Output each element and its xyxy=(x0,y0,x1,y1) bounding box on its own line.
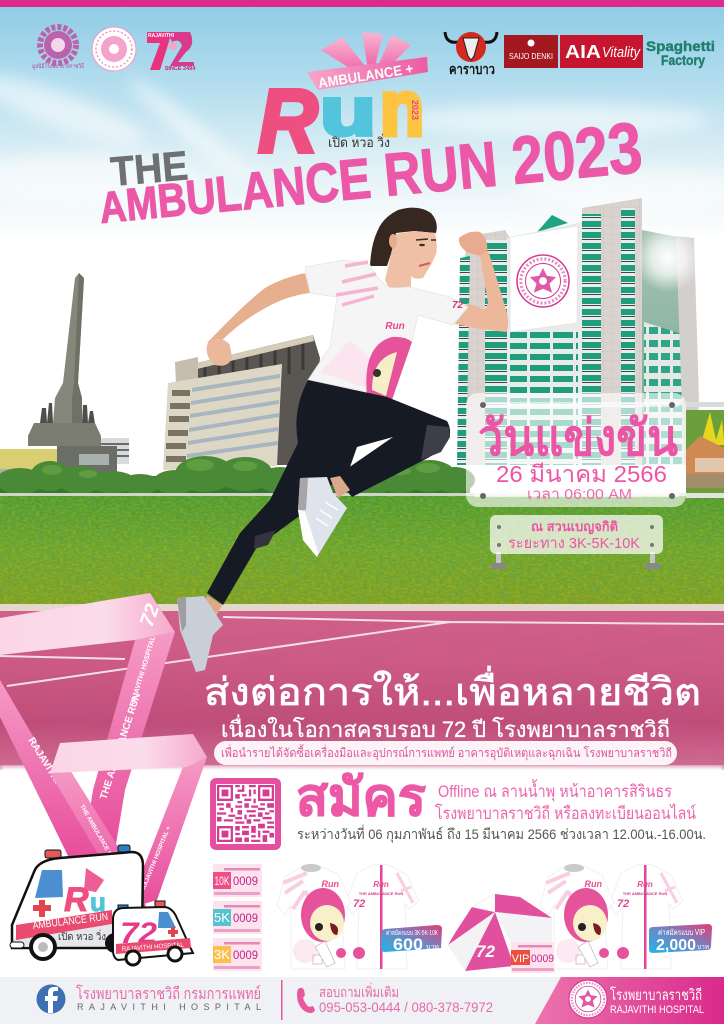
main title: THE xyxy=(109,143,190,195)
race bibs: 5K xyxy=(214,910,230,925)
large ambulance medal: u xyxy=(90,887,106,917)
event logo: Ambulance Run: เปิด หวอ วิ่ง xyxy=(328,134,390,150)
main title: AMBULANCE RUN 2023 xyxy=(95,108,646,239)
large ambulance medal xyxy=(10,845,143,959)
race-day sign xyxy=(466,393,724,507)
footer hospital name xyxy=(76,984,261,1012)
top-left hospital logos xyxy=(32,27,196,72)
race-day sign: 26 มีนาคม 2566 xyxy=(496,461,667,487)
slogan xyxy=(204,666,701,742)
medal lanyards: 72 xyxy=(136,601,164,630)
price tag 600 xyxy=(381,925,442,954)
sponsor logos: คาราบาว xyxy=(449,61,495,77)
grass field xyxy=(0,493,724,606)
upper shoe xyxy=(298,477,347,557)
front arm xyxy=(450,232,508,332)
location sign: ระยะทาง 3K-5K-10K xyxy=(508,535,640,552)
race-day sign: เวลา 06:00 AM xyxy=(527,486,632,503)
race bibs: 0009 xyxy=(233,911,258,925)
price tag 600: บาท xyxy=(426,944,439,951)
large ambulance medal: เปิด หวอ วิ่ง xyxy=(58,929,106,943)
divider xyxy=(281,980,282,1020)
contact phone numbers xyxy=(319,983,493,1015)
mascot on shirt xyxy=(366,337,412,400)
VIP bib: 0009 xyxy=(531,953,554,965)
VIP shirts xyxy=(540,864,683,969)
VIP bib: VIP xyxy=(512,953,529,965)
event logo: Ambulance Run: 2023 xyxy=(410,100,420,120)
face and neck xyxy=(385,231,437,290)
icon: facebook xyxy=(36,984,66,1014)
victory monument xyxy=(0,273,129,475)
trees xyxy=(0,456,475,496)
sponsor logos: SAIJO DENKI xyxy=(509,51,553,61)
large ambulance medal: R xyxy=(64,881,89,919)
registration details xyxy=(297,779,706,843)
event logo: Ambulance Run: AMBULANCE + xyxy=(317,60,414,91)
small ambulance medal xyxy=(113,901,193,965)
footer hospital name: RAJAVITHI HOSPITAL xyxy=(77,1002,261,1012)
price tag 600: 600 xyxy=(393,935,423,954)
top-left hospital logos: มูลนิธิโรงพยาบาลราชวิถี xyxy=(32,62,84,70)
price tag 2,000: 2,000 xyxy=(656,937,696,954)
sponsor logos: Spaghetti xyxy=(646,39,715,54)
footer hospital name: โรงพยาบาลราชวิถี กรมการแพทย์ xyxy=(76,984,261,1003)
running track xyxy=(0,604,724,776)
purpose pill: เพื่อนำรายได้จัดซื้อเครื่องมือและอุปกรณ์การแพทย์ อาคารอุบัติเหตุและฉุกเฉิน โรงพยาบาลราชวิถี xyxy=(221,744,672,761)
race bibs: 3K xyxy=(214,947,230,962)
footer hospital badge: RAJAVITHI HOSPITAL xyxy=(610,1004,704,1016)
contact phone numbers: สอบถามเพิ่มเติม xyxy=(319,983,399,1000)
VIP bib xyxy=(511,942,555,973)
top magenta bar xyxy=(0,0,724,7)
small ambulance medal: 72 xyxy=(120,917,157,950)
registration heading: สมัคร xyxy=(296,769,426,827)
price tag 2,000 xyxy=(649,924,712,954)
sponsor logos xyxy=(445,32,715,77)
race-day sign: วันแข่งขัน xyxy=(478,410,678,466)
ponytail and hair xyxy=(370,208,437,266)
runner xyxy=(177,208,508,672)
purpose pill xyxy=(214,741,677,765)
slogan: ส่งต่อการให้...เพื่อหลายชีวิต xyxy=(204,666,701,714)
shirt xyxy=(305,260,468,400)
tights xyxy=(207,380,450,605)
low-rise building xyxy=(163,335,320,470)
medal lanyards: THE AMBULANCE RUN xyxy=(98,692,143,801)
price tag 2,000: บาท xyxy=(697,944,709,951)
medal lanyards: THE AMBULANCE RUN xyxy=(78,804,117,865)
back arm xyxy=(207,273,310,366)
umbrella xyxy=(448,894,552,971)
price tag 600: ค่าสมัครแบบ 3K-5K-10K xyxy=(386,929,438,937)
slogan: เนื่องในโอกาสครบรอบ 72 ปี โรงพยาบาลราชวิถี xyxy=(221,714,670,742)
shirt: 72 xyxy=(452,300,464,311)
medal lanyards: RAJAVITHI + xyxy=(25,736,67,793)
small ambulance medal: RAJAVITHI HOSPITAL xyxy=(122,942,184,953)
sky background xyxy=(0,0,724,240)
price tag 2,000: ค่าสมัครแบบ VIP xyxy=(658,928,705,937)
sponsor logos: Vitality xyxy=(602,44,641,61)
medal lanyards xyxy=(0,593,207,908)
registration details: Offline ณ ลานน้ำพุ หน้าอาคารสิรินธร xyxy=(438,779,672,802)
location sign xyxy=(490,515,663,569)
umbrella: 72 xyxy=(476,942,495,961)
icon: phone xyxy=(297,988,315,1013)
temple at right xyxy=(686,410,724,495)
ankles xyxy=(203,476,350,625)
contact phone numbers: 095-053-0444 / 080-378-7972 xyxy=(319,999,493,1015)
sponsor logos: Factory xyxy=(661,53,705,68)
shirt: Run xyxy=(385,321,405,332)
event logo: Ambulance Run: n xyxy=(380,64,424,152)
medal lanyards: RAJAVITHI HOSPITAL xyxy=(129,635,158,708)
sponsor logos: AIA xyxy=(565,42,601,62)
event logo: Ambulance Run xyxy=(258,32,428,172)
race bibs xyxy=(213,864,262,971)
medal lanyards: RAJAVITHI HOSPITAL + xyxy=(141,825,172,891)
location sign: ณ สวนเบญจกิติ xyxy=(531,519,618,535)
race bibs: 10K xyxy=(214,874,230,888)
footer hospital badge xyxy=(535,977,724,1024)
hospital building xyxy=(457,198,702,465)
top-left hospital logos: RAJAVITHI xyxy=(148,33,175,39)
event logo: Ambulance Run: u xyxy=(320,74,376,150)
large ambulance medal: AMBULANCE RUN xyxy=(32,911,109,932)
standard shirts xyxy=(277,864,419,969)
footer bar xyxy=(0,977,724,1024)
lower shoe xyxy=(177,596,223,672)
QR code xyxy=(210,778,281,850)
event logo: Ambulance Run: R xyxy=(258,72,318,172)
top-left hospital logos: SINCE 2494 xyxy=(165,66,196,72)
race bibs: 0009 xyxy=(233,948,258,962)
race bibs: 0009 xyxy=(233,874,258,888)
